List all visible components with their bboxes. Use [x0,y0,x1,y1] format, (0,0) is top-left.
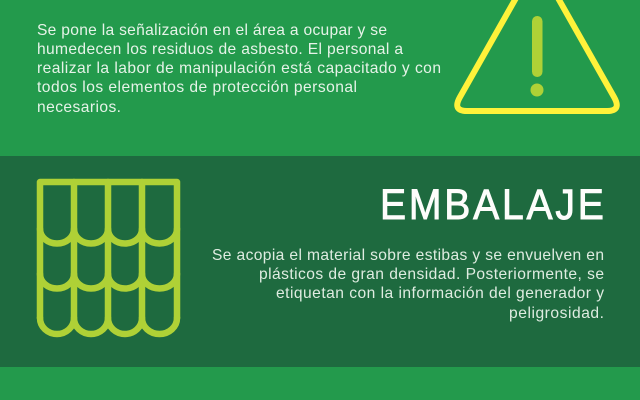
text block: preparation description [37,22,441,116]
text block: preparation description: realizar la labor de manipulación está capacitado y con [37,60,441,77]
text block: embalaje description: Se acopia el material sobre estibas y se envuelven en [212,247,604,264]
icon: roof tiles [40,182,177,334]
text block: embalaje description: plásticos de gran densidad. Posteriormente, se [259,266,604,283]
panel: embalaje section [0,156,640,367]
panel: preparation section [0,0,640,156]
icon: warning triangle [457,0,617,111]
text block: preparation description: necesarios. [37,99,121,116]
text block: embalaje description [212,247,604,322]
text block: preparation description: humedecen los residuos de asbesto. El personal a [37,41,403,58]
text block: preparation description: Se pone la señalización en el área a ocupar y se [37,22,387,39]
text block: embalaje description: etiquetan con la información del generador y [276,285,604,302]
panel: next section strip [0,367,640,400]
text block: embalaje description: peligrosidad. [509,305,604,322]
heading: EMBALAJE: EMBALAJE [380,180,604,228]
text block: preparation description: todos los elementos de protección personal [37,79,357,96]
